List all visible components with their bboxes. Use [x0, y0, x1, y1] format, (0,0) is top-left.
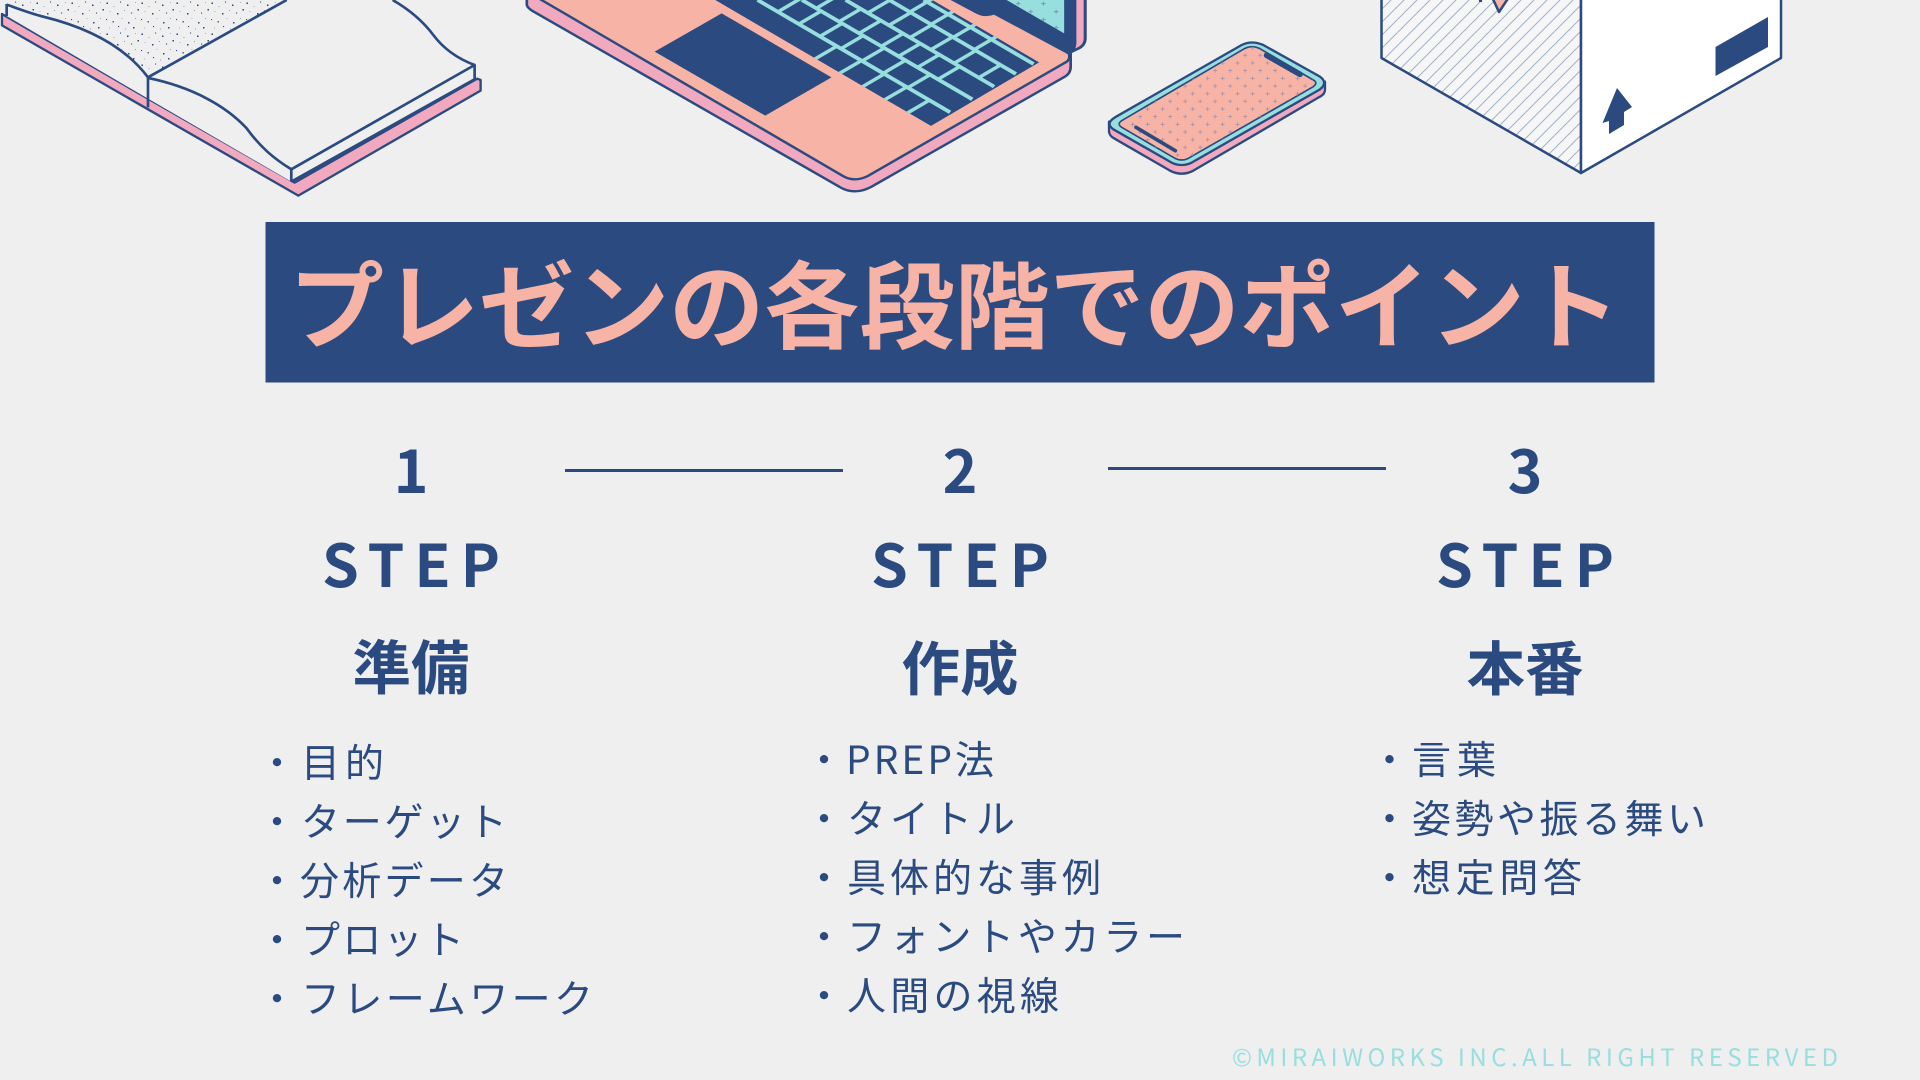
- step 1 list: プロット: [301, 910, 464, 966]
- step 2 label: STEP: [871, 519, 1049, 604]
- laptop deck: [539, 0, 1069, 179]
- step 3 list: ・: [1370, 789, 1409, 845]
- box right white face: [1581, 0, 1781, 173]
- laptop screen lid: [950, 0, 1085, 53]
- step 2 number: 2: [943, 425, 977, 510]
- step 1 heading: 準備: [352, 621, 470, 706]
- step 2 list: タイトル: [847, 789, 1015, 845]
- step 1 list: ・: [258, 910, 297, 966]
- step 2 list: ・: [804, 730, 844, 786]
- title banner: プレゼンの各段階でのポイント: [289, 232, 1620, 369]
- step 3 list: 想定問答: [1412, 848, 1582, 904]
- step 1 list: 分析データ: [300, 851, 508, 907]
- step 3 label: STEP: [1436, 519, 1614, 604]
- step 3 list: 姿勢や振る舞い: [1412, 789, 1706, 845]
- step 3 list: [1370, 730, 1706, 904]
- keyboard: [715, 0, 1039, 126]
- box tape tip: [1492, 0, 1509, 12]
- step 2 list: フォントやカラー: [847, 907, 1185, 963]
- step 3 number: 3: [1508, 425, 1542, 510]
- step 3 list: ・: [1370, 730, 1409, 786]
- step 2 list: ・: [804, 848, 844, 904]
- step 1 list: 目的: [301, 733, 384, 789]
- step 2 list: ・: [804, 907, 844, 963]
- step 2 column: [804, 425, 1185, 1022]
- step 2 list: 具体的な事例: [847, 848, 1101, 904]
- box left hatched face: [1382, 0, 1581, 173]
- step 2 list: PREP法: [846, 730, 994, 786]
- step 3 column: [1370, 425, 1706, 904]
- step 1 column: [258, 425, 593, 1025]
- step 2 list: ・: [804, 966, 844, 1022]
- step 1 list: フレームワーク: [301, 969, 593, 1025]
- step 1 list: ・: [258, 851, 297, 907]
- step 3 list: 言葉: [1412, 730, 1496, 786]
- step 2 list: [804, 730, 1185, 1022]
- icon: laptop: [527, 0, 1085, 191]
- step 1 list: ・: [258, 733, 297, 789]
- trackpad: [655, 13, 831, 116]
- step 1 list: ・: [258, 792, 297, 848]
- step 1 list: ・: [258, 969, 297, 1025]
- step 2 list: ・: [804, 789, 844, 845]
- icon: cardboard box: [1382, 0, 1781, 173]
- step 1 number: 1: [394, 425, 428, 510]
- copyright footer: ©MIRAIWORKS INC.ALL RIGHT RESERVED: [1232, 1038, 1838, 1073]
- step 1 list: [258, 733, 593, 1025]
- step 2 heading: 作成: [901, 622, 1019, 707]
- connector line 2 to 3: [1108, 467, 1386, 470]
- step 3 heading: 本番: [1466, 622, 1584, 707]
- connector line 1 to 2: [565, 469, 843, 472]
- box label: [1716, 17, 1768, 76]
- icon: open book: [2, 0, 481, 196]
- laptop base edge: [527, 0, 1071, 191]
- step 2 list: 人間の視線: [847, 966, 1059, 1022]
- box up arrow: [1602, 88, 1632, 134]
- step 3 list: ・: [1370, 848, 1409, 904]
- icon: smartphone: [1109, 42, 1325, 174]
- step 1 list: ターゲット: [301, 792, 507, 848]
- box tape stub: [1479, 0, 1482, 2]
- step 1 label: STEP: [322, 519, 500, 604]
